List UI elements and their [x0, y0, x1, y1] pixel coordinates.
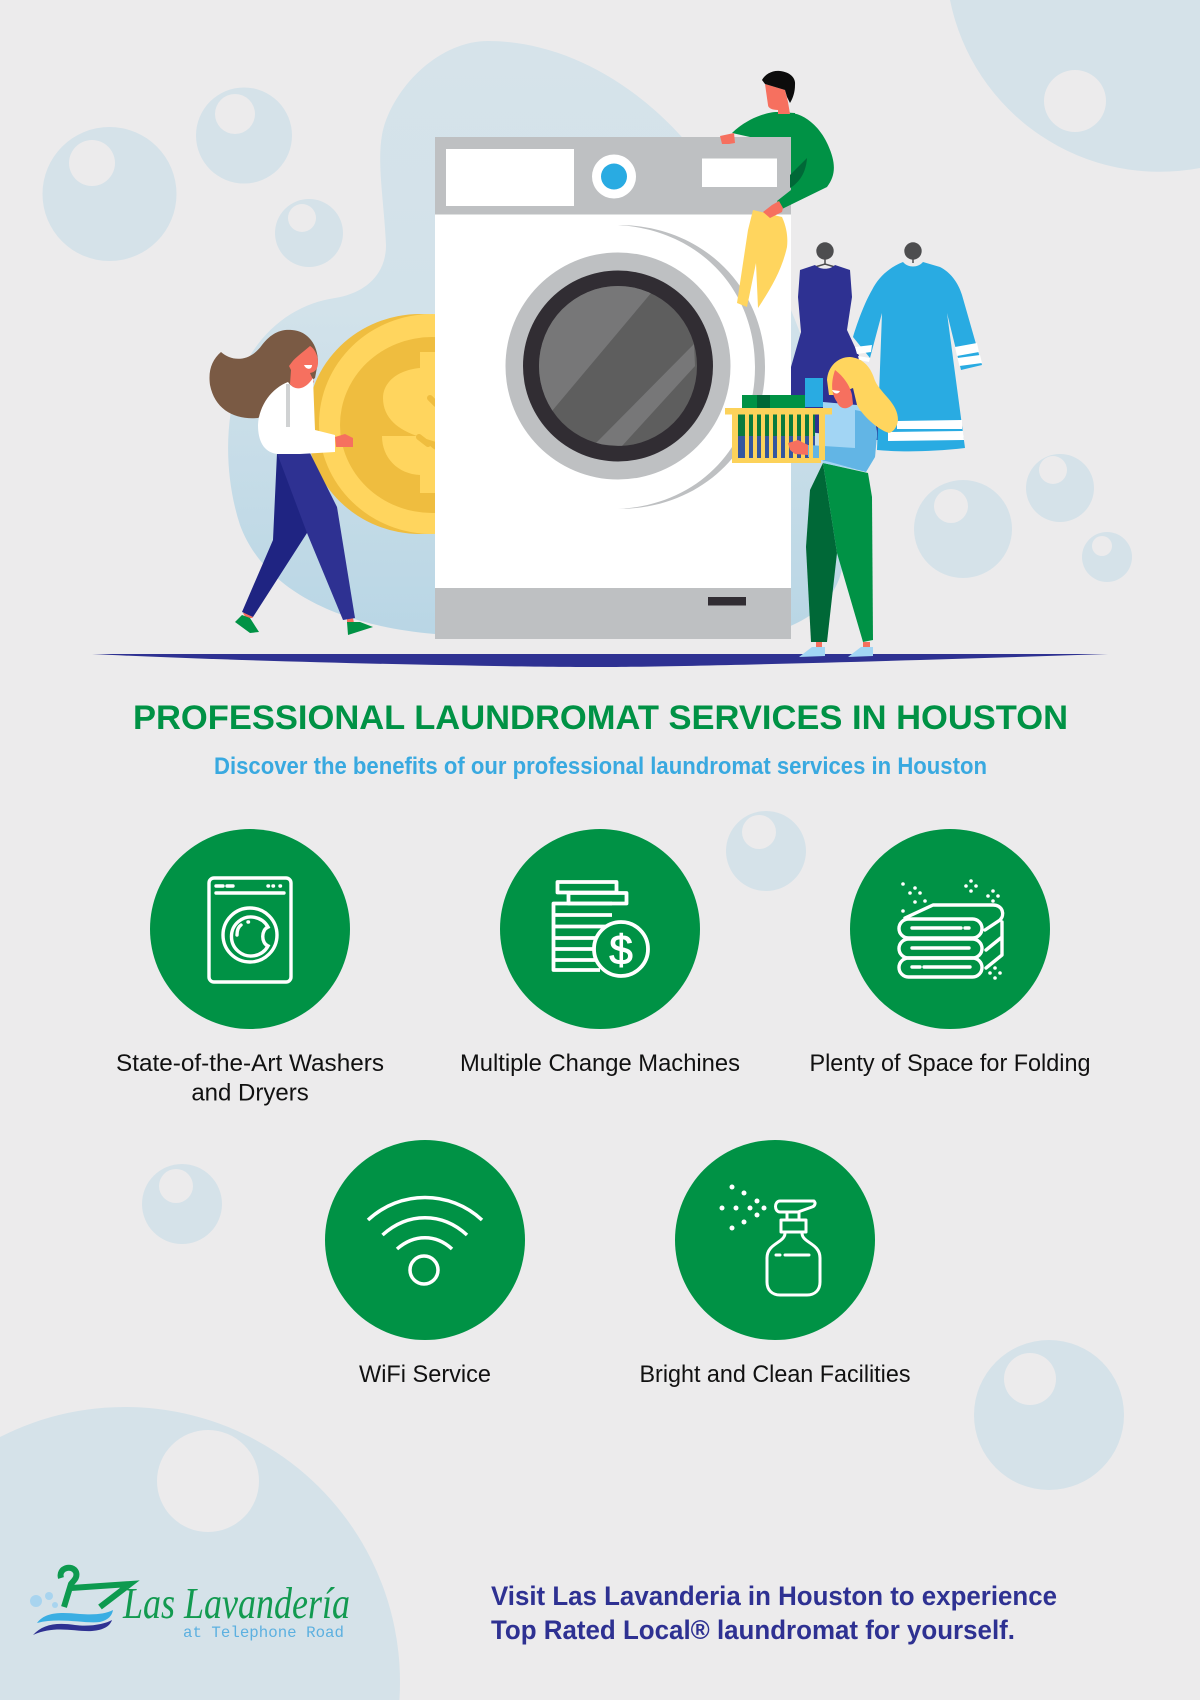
illustration: man torso behind washer	[732, 112, 795, 145]
label: Plenty of Space for Folding	[810, 1050, 1090, 1077]
icon: coin stack with dollar	[500, 829, 700, 1029]
illustration: woman with laundry basket	[725, 357, 898, 657]
label: WiFi Service	[359, 1361, 491, 1388]
illustration: hanging navy dress	[791, 242, 897, 440]
icon: wifi	[325, 1140, 525, 1340]
benefit: washers and dryers	[116, 829, 384, 1106]
background blob behind the washer	[228, 41, 844, 634]
logo: Las Lavanderia	[30, 1568, 350, 1642]
illustration: hanging blue dress	[853, 242, 982, 451]
label: and Dryers	[191, 1080, 309, 1106]
logo tagline: at Telephone Road	[183, 1624, 344, 1642]
icon: washing machine	[150, 829, 350, 1029]
benefit: change machines	[460, 829, 740, 1077]
label: Multiple Change Machines	[460, 1050, 740, 1077]
label: Bright and Clean Facilities	[640, 1361, 910, 1388]
logo hanger	[61, 1568, 130, 1607]
illustration: giant coin	[311, 314, 435, 534]
title: PROFESSIONAL LAUNDROMAT SERVICES IN HOUSTON	[133, 699, 1068, 737]
logo wordmark: Las Lavandería	[122, 1579, 350, 1628]
illustration: washing machine	[435, 137, 791, 639]
logo waves	[33, 1610, 113, 1635]
subtitle: Discover the benefits of our professional laundromat services in Houston	[214, 753, 987, 780]
call to action: Visit Las Lavanderia in Houston to experience	[491, 1581, 1057, 1611]
illustration: woman pushing coin	[209, 330, 373, 635]
benefit: clean facilities	[640, 1140, 910, 1388]
logo bubbles	[30, 1592, 58, 1608]
call to action: Top Rated Local® laundromat for yourself.	[491, 1615, 1015, 1645]
label: State-of-the-Art Washers	[116, 1050, 384, 1077]
benefit: wifi	[325, 1140, 525, 1388]
illustration: man head, sleeve, hands and yellow cloth	[720, 71, 834, 308]
benefit: folding space	[810, 829, 1090, 1077]
icon: coin stack with dollar: $	[609, 926, 633, 973]
floor line	[92, 654, 1108, 667]
icon: spray bottle	[675, 1140, 875, 1340]
icon: folded towels	[850, 829, 1050, 1029]
